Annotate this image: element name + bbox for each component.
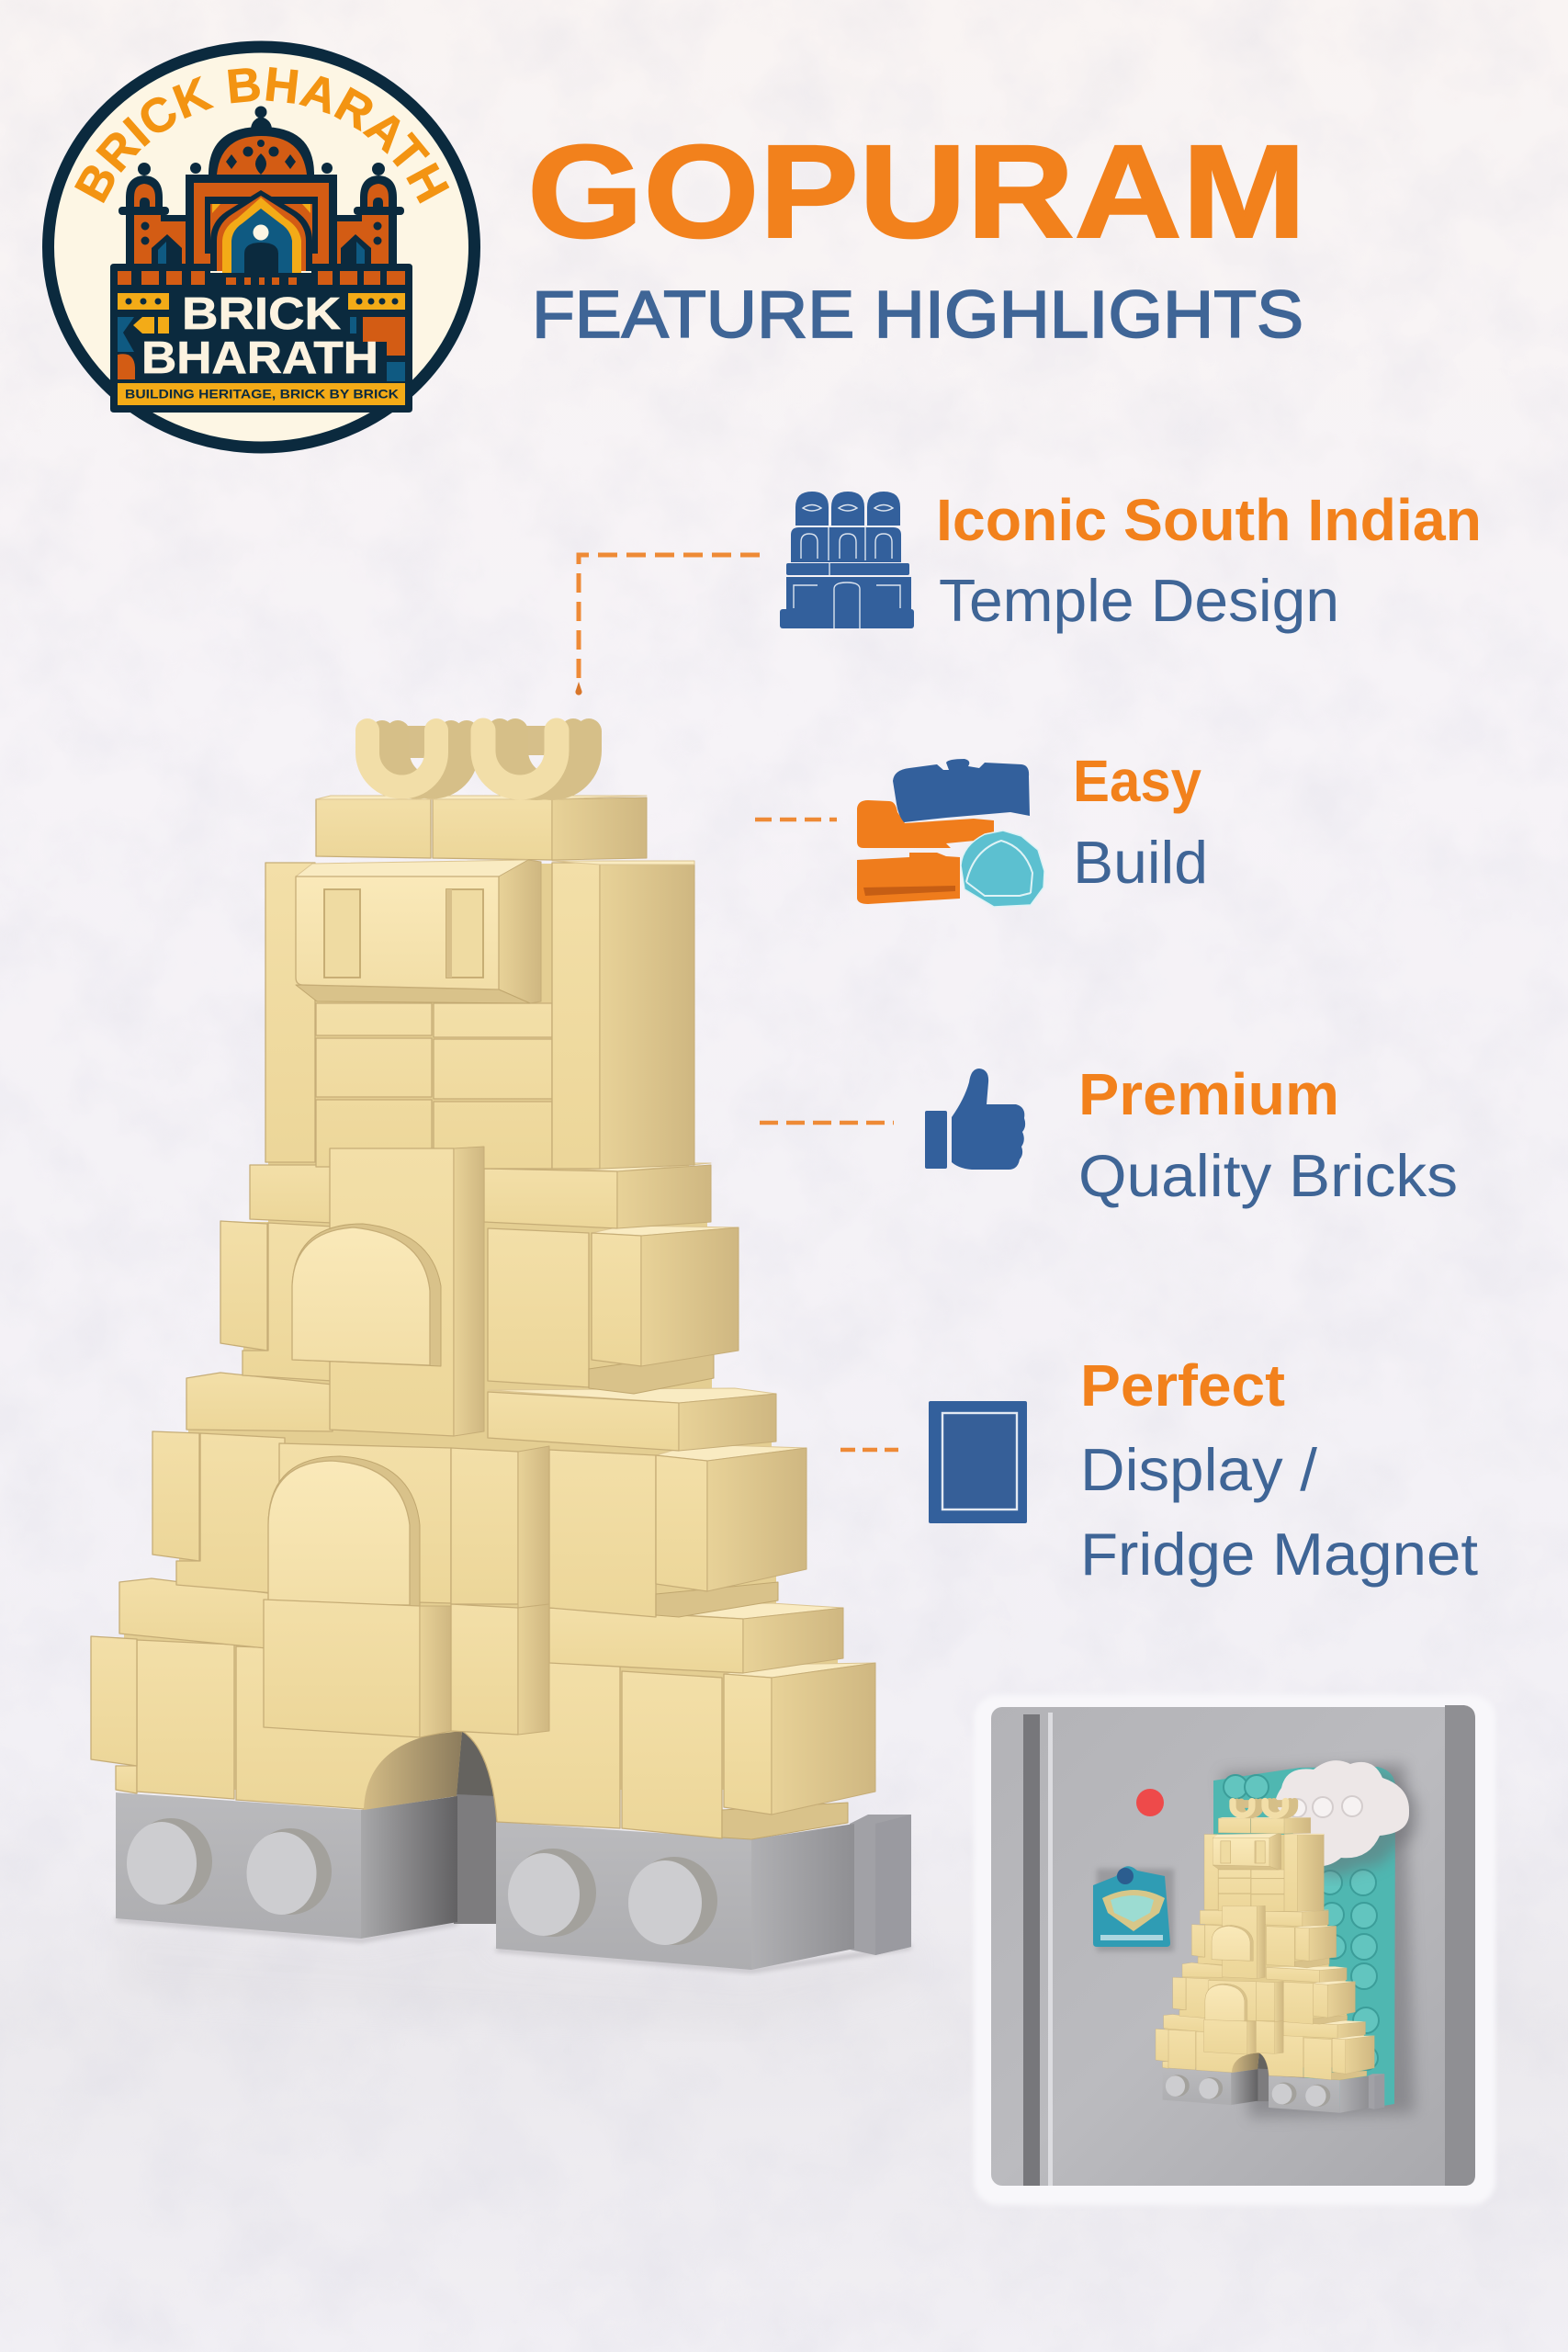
right side tower (337, 163, 404, 265)
blue brick (893, 759, 1030, 822)
feature 1 heading: Iconic South Indian (936, 487, 1482, 553)
tier 3 (152, 1431, 807, 1617)
grey base bricks (116, 1792, 911, 1970)
feature 4 heading: Perfect (1080, 1352, 1285, 1419)
tier 4 (91, 1636, 875, 1839)
crown row (316, 797, 431, 858)
tier 3 centre stack (264, 1443, 549, 1737)
subtitle: FEATURE HIGHLIGHTS (532, 278, 1303, 352)
front shrine panel (296, 860, 528, 876)
cloud magnet (1275, 1760, 1417, 1875)
ledge 2 (186, 1373, 776, 1451)
feature 4 text line 2: Fridge Magnet (1080, 1521, 1478, 1588)
floor shadow and reflection (116, 1918, 911, 2030)
plaque title: BRICK (182, 289, 341, 339)
tagline: BUILDING HERITAGE, BRICK BY BRICK (125, 386, 399, 401)
left side tower (118, 163, 186, 265)
door highlight (1048, 1713, 1053, 2186)
feature 1 text: Temple Design (939, 567, 1339, 634)
feature 3 text: Quality Bricks (1078, 1142, 1458, 1209)
feature 2 text: Build (1073, 829, 1208, 896)
connector: temple design (575, 555, 760, 695)
feature 3 heading: Premium (1078, 1061, 1339, 1127)
red magnet dot (1136, 1789, 1164, 1816)
connector: fridge magnet (840, 1448, 898, 1452)
ledge 1 (250, 1163, 711, 1228)
icon: display frame (929, 1401, 1027, 1523)
panel: fridge magnet inset (974, 1695, 1495, 2205)
icon: temple (780, 492, 914, 628)
teal baseplate with studs (1213, 1767, 1395, 2107)
connector: premium quality (760, 1121, 894, 1125)
plaque title line 2: BHARATH (141, 334, 378, 383)
badge ring (48, 47, 474, 447)
fridge door (991, 1707, 1475, 2186)
curved brand text: BRICK BHARATH (74, 67, 450, 204)
orange upper brick (857, 800, 994, 848)
baseplate shadow (1222, 1764, 1415, 2118)
orange lower brick (857, 853, 960, 904)
door right edge (1445, 1705, 1475, 2186)
icon: thumbs up (925, 1069, 1025, 1170)
connector: easy build (755, 818, 837, 821)
left base brick (116, 1792, 361, 1939)
base studs (130, 1818, 212, 1905)
teal gem (961, 831, 1044, 907)
arch opening (457, 1731, 497, 1796)
logo plaque (110, 264, 412, 413)
top rings (367, 726, 589, 787)
logo: Brick Bharath badge (42, 40, 480, 454)
central column (292, 1147, 484, 1436)
rear connector (454, 1794, 500, 1924)
tier 2 (220, 1221, 739, 1394)
main product: gopuram brick model (91, 726, 911, 1970)
model backing fill (124, 864, 871, 1790)
small souvenir magnet (1093, 1866, 1174, 1951)
tagline band (118, 383, 405, 405)
feature 2 heading: Easy (1073, 748, 1201, 814)
feature 4 text line 1: Display / (1080, 1436, 1318, 1503)
title: GOPURAM (527, 118, 1306, 266)
icon: bricks (857, 759, 1044, 907)
shrine windows (324, 889, 360, 978)
tab (850, 1815, 911, 1955)
inset frame (974, 1695, 1495, 2205)
mini gopuram magnet (1156, 1800, 1384, 2113)
temple illustration (118, 107, 404, 273)
upper tower (265, 796, 694, 1169)
ledge 3 (119, 1578, 843, 1673)
door handle strip (1023, 1714, 1040, 2186)
right base brick (496, 1822, 751, 1970)
